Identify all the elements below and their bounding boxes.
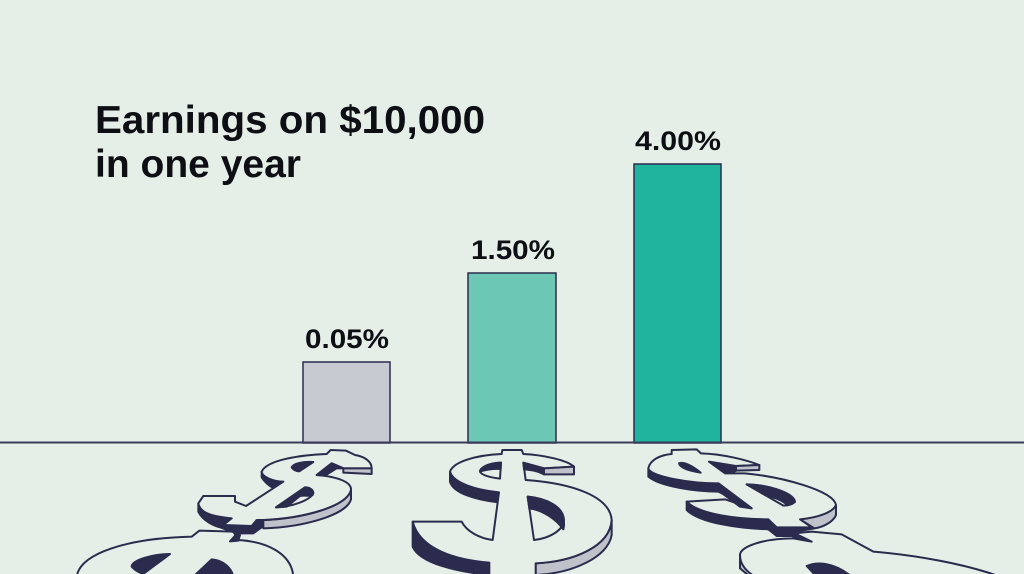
icon: dollar sign upper left xyxy=(198,450,372,533)
icon: dollar sign centre xyxy=(413,450,612,574)
icon: dollar sign lower right xyxy=(740,532,1000,574)
title: in one year xyxy=(95,143,301,186)
icon: dollar sign lower left xyxy=(77,531,293,574)
bar: 4.00% xyxy=(634,126,721,443)
bar: 4.00%: 4.00% xyxy=(635,126,721,156)
bar: 1.50% xyxy=(468,235,556,443)
title: Earnings on $10,000 xyxy=(95,99,485,142)
bar: 0.05%: 0.05% xyxy=(305,324,389,354)
icon: dollar sign upper right xyxy=(648,449,836,536)
bar: 0.05% xyxy=(303,324,390,443)
bar: 1.50%: 1.50% xyxy=(471,235,555,265)
baseline xyxy=(0,442,1024,444)
title xyxy=(95,99,485,186)
bar chart xyxy=(0,126,1024,444)
